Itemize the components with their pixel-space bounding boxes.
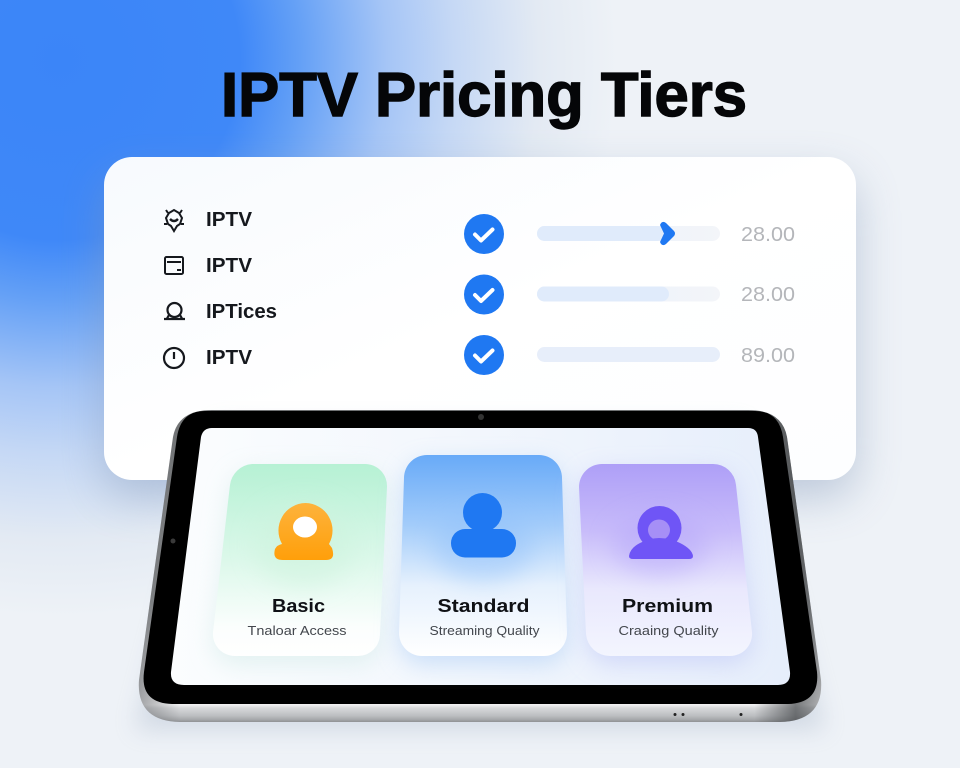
icon: gear badge (164, 210, 184, 231)
label: Standard: Standard (438, 596, 530, 616)
icon: user outline (164, 303, 185, 319)
price values: 89.00 (741, 344, 795, 367)
tablet bezel (144, 411, 817, 704)
label: Basic: Basic (272, 596, 325, 616)
label: IPTV row 2: IPTV (206, 255, 253, 277)
tablet (135, 410, 825, 730)
card: Basic (213, 464, 387, 664)
card: Premium (579, 464, 752, 664)
icon: window (165, 257, 183, 274)
text: Craaing Quality: Craaing Quality (618, 624, 719, 638)
camera and hardware dots (170, 414, 742, 716)
text: Streaming Quality: Streaming Quality (430, 624, 540, 638)
check icons (464, 214, 504, 375)
icon: orange user (274, 503, 333, 560)
label: IPTV row 1: IPTV (206, 209, 253, 231)
price values: 28.00 (741, 223, 795, 246)
icon: blue user (451, 493, 516, 558)
title: IPTV Pricing Tiers (221, 61, 747, 130)
tablet body (139, 410, 821, 722)
label: Premium: Premium (622, 596, 713, 616)
feature labels with icons (164, 209, 277, 369)
progress bars (537, 222, 720, 362)
icon: purple user (629, 506, 693, 559)
card: Standard (399, 455, 567, 664)
tablet screen (171, 428, 790, 685)
price values: 28.00 (741, 283, 795, 306)
panel: pricing feature list (104, 157, 856, 498)
price values (741, 223, 795, 367)
label: IPTV row 4: IPTV (206, 347, 253, 369)
text: Tnaloar Access: Tnaloar Access (248, 624, 346, 638)
label: IPTices: IPTices (206, 301, 277, 323)
icon: clock (164, 348, 184, 368)
